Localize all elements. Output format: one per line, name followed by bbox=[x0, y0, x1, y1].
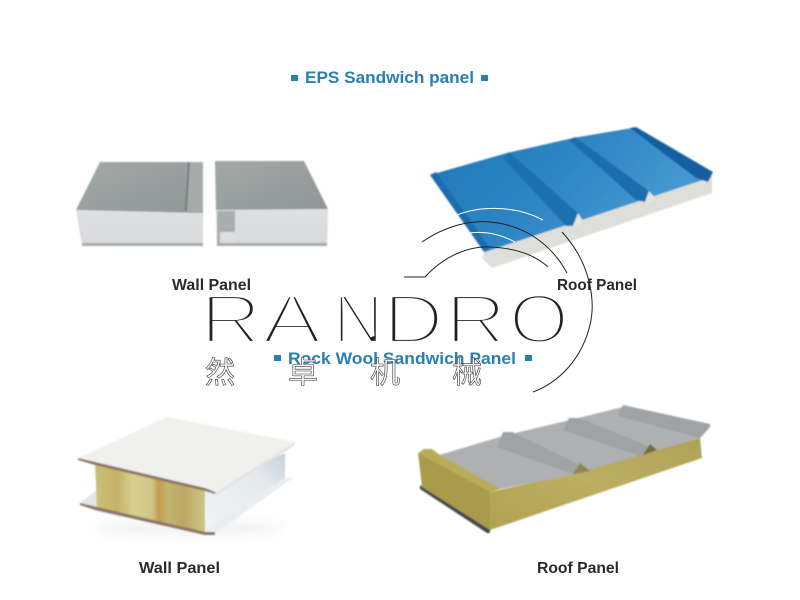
left edge rib bbox=[418, 449, 500, 492]
left edge rib bbox=[430, 172, 490, 252]
silver side bbox=[205, 453, 285, 528]
logo wordmark: R bbox=[445, 279, 507, 358]
mineral wool core bbox=[95, 463, 205, 533]
logo arcs bbox=[404, 208, 592, 392]
logo wordmark: A bbox=[262, 280, 322, 359]
image: rock wool wall panel bbox=[78, 417, 295, 536]
front wool side bbox=[490, 438, 702, 530]
left panel foam core bbox=[76, 210, 203, 245]
label: rock wool roof panel: Roof Panel bbox=[537, 560, 619, 577]
rib 1 bbox=[497, 432, 590, 474]
rib 3 bbox=[618, 405, 710, 438]
logo wordmark: O bbox=[509, 279, 569, 358]
label: EPS roof panel: Roof Panel bbox=[557, 277, 637, 294]
image: rock wool roof panel bbox=[418, 405, 710, 533]
heading: EPS Sandwich panel: EPS Sandwich panel bbox=[305, 69, 474, 87]
rib 1 bbox=[503, 152, 578, 226]
right panel foam core bbox=[216, 209, 328, 245]
rib 2 bbox=[563, 418, 657, 456]
logo wordmark: N bbox=[333, 280, 384, 358]
heading: Rock Wool Sandwich Panel: Rock Wool Sandwich Panel bbox=[288, 350, 516, 368]
foam core bbox=[482, 173, 712, 268]
logo wordmark bbox=[200, 279, 569, 359]
rib 3 bbox=[630, 127, 713, 182]
grey steel surface bbox=[436, 407, 710, 489]
label: rock wool wall panel: Wall Panel bbox=[139, 560, 220, 577]
rib 2 bbox=[569, 137, 649, 202]
right panel steel face bbox=[215, 161, 328, 210]
label: EPS wall panel: Wall Panel bbox=[172, 277, 251, 294]
watermark: RANDRO logo bbox=[200, 208, 592, 392]
logo wordmark: R bbox=[200, 279, 262, 358]
dark bottom edge bbox=[420, 485, 490, 533]
image: EPS wall panel bbox=[76, 161, 328, 246]
left wool side bbox=[418, 453, 490, 530]
logo wordmark: D bbox=[383, 281, 444, 358]
logo Chinese name: 然卓机械 bbox=[205, 357, 482, 390]
image: EPS roof panel bbox=[430, 127, 713, 268]
lower steel flange bbox=[207, 478, 293, 534]
left panel steel face bbox=[76, 162, 203, 213]
blue steel face bbox=[430, 128, 712, 252]
right panel joint notch bbox=[217, 211, 235, 245]
white top steel bbox=[78, 417, 295, 493]
